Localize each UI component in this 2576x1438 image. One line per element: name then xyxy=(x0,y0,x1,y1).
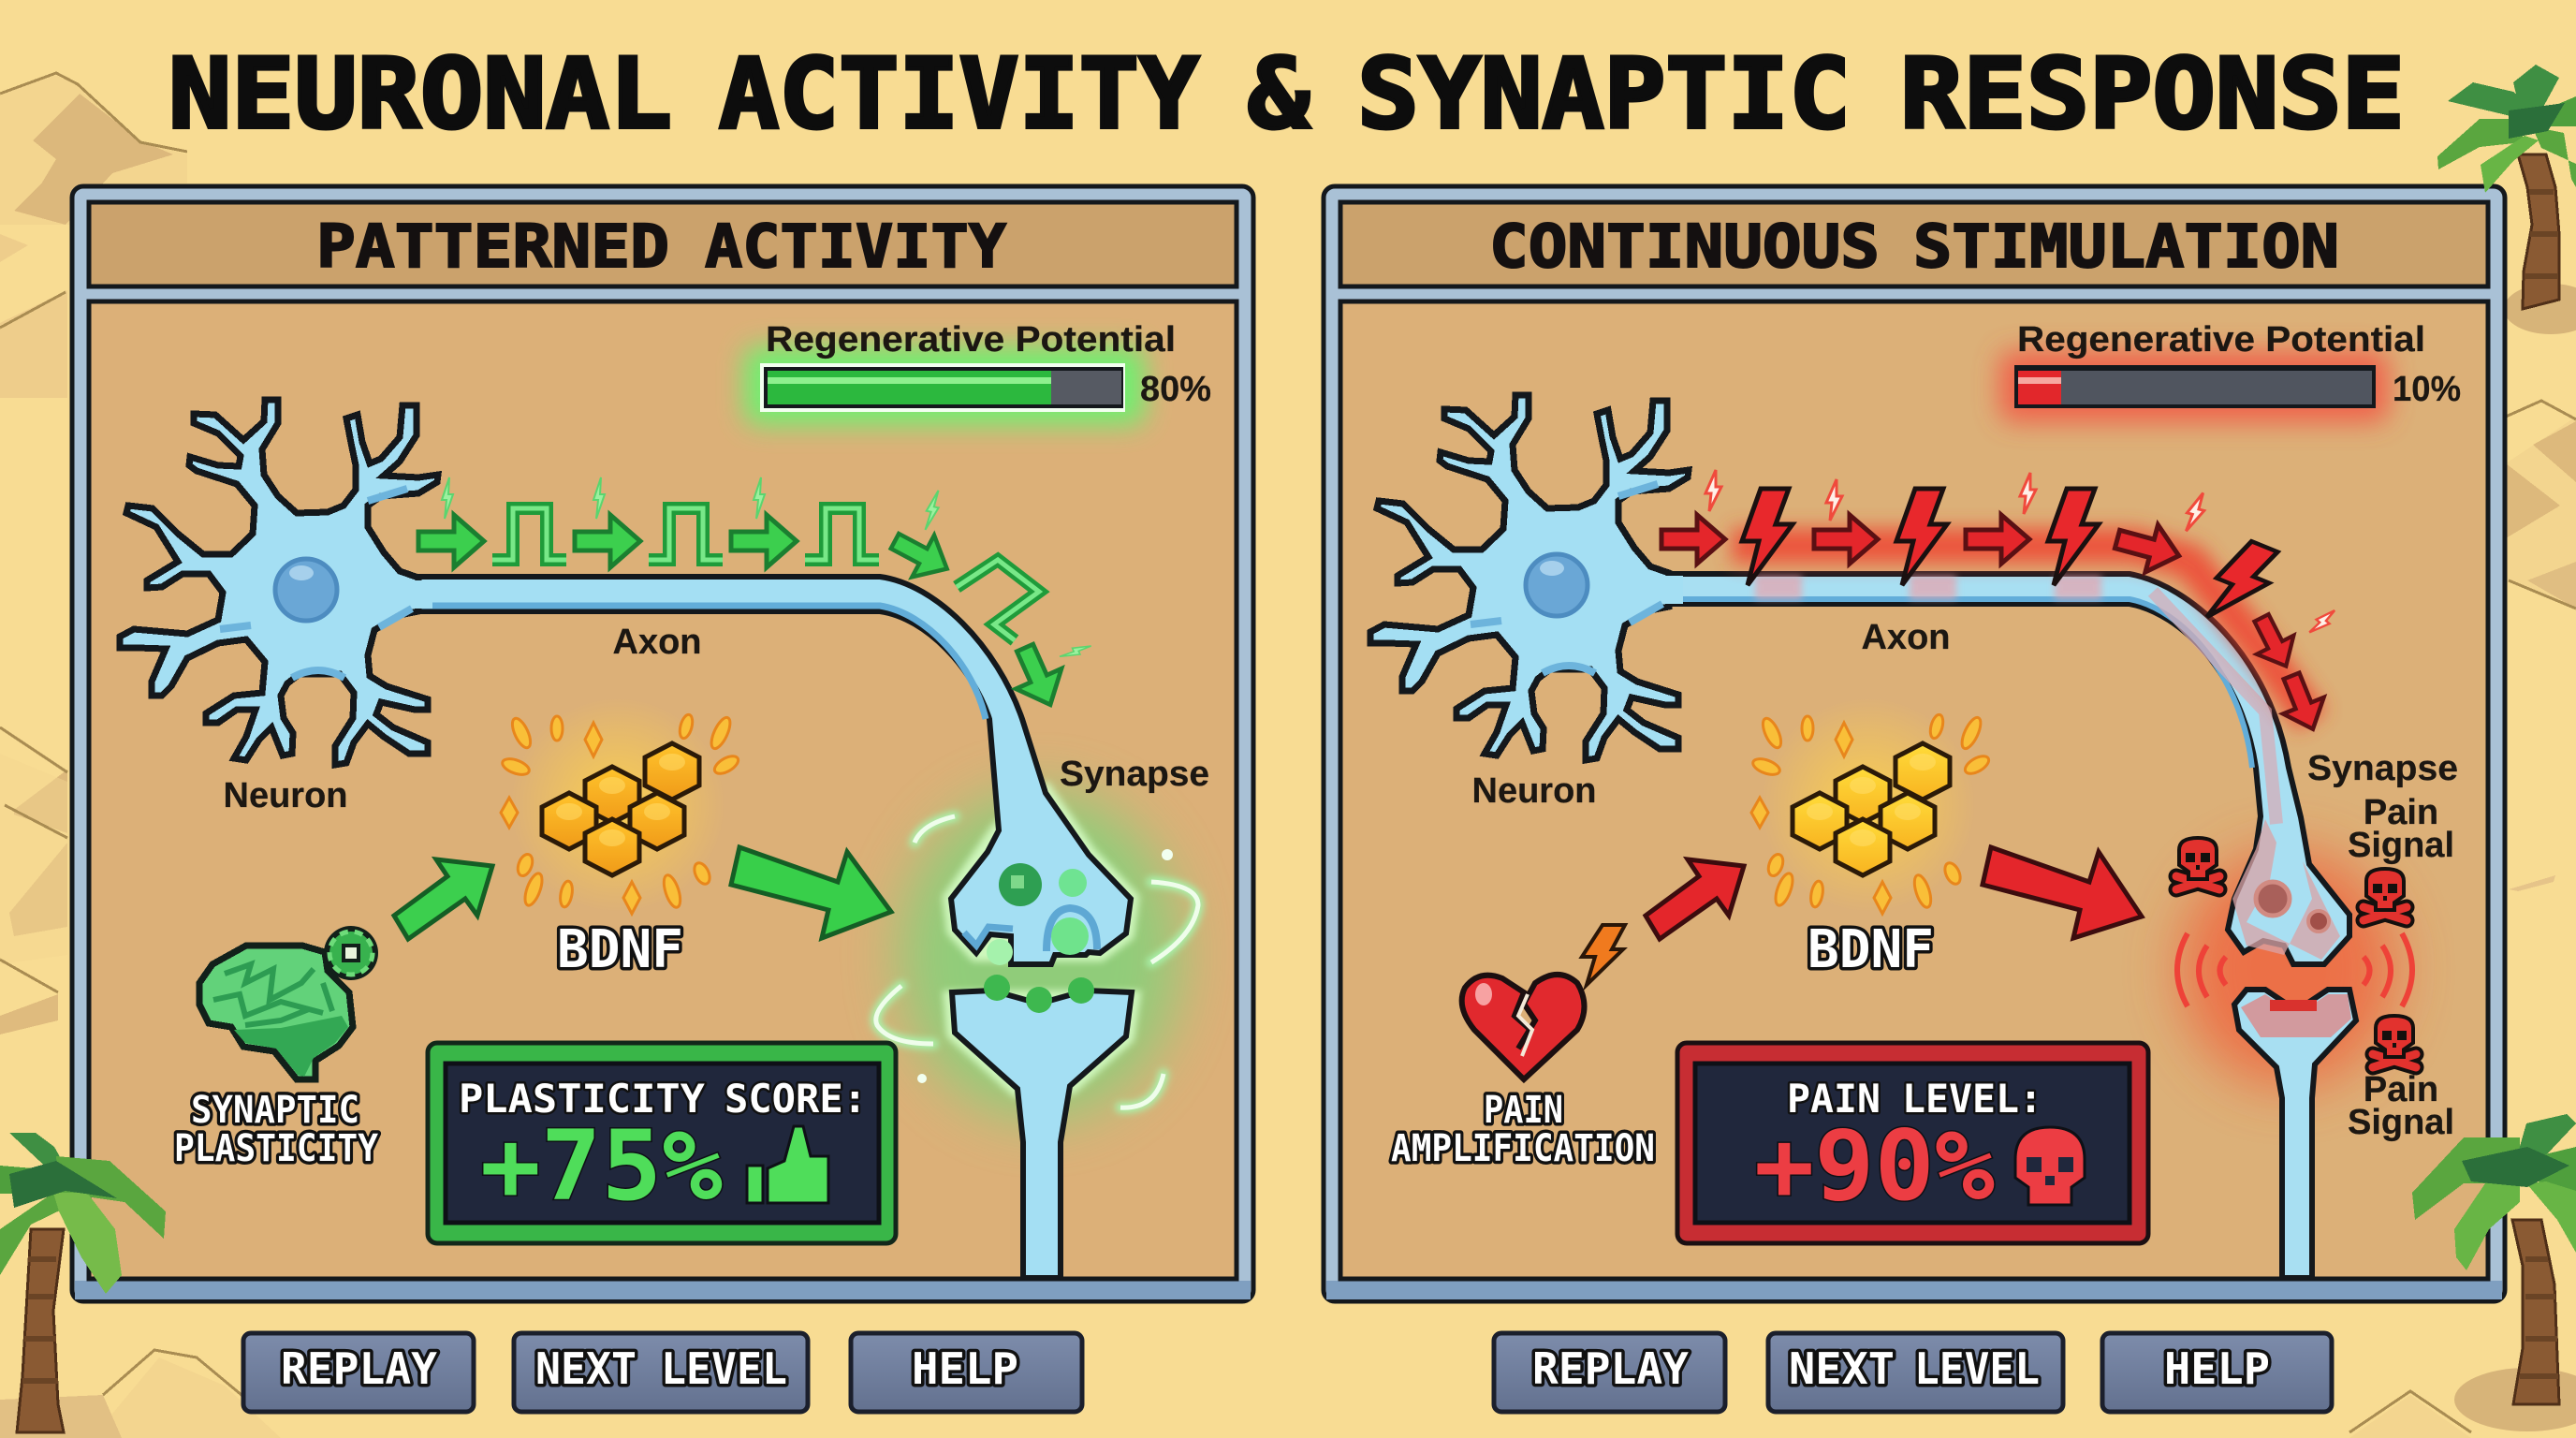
label: synapse: Synapse xyxy=(2307,749,2458,788)
panel heading: PATTERNED xyxy=(316,213,669,281)
regenerative potential meter: 80% xyxy=(1140,370,1211,409)
sand dunes, left margin xyxy=(0,73,281,1438)
plasticity score box: SCORE: xyxy=(724,1076,867,1122)
pain level box xyxy=(1677,1043,2148,1243)
buttons row, left xyxy=(243,1333,1082,1412)
post-synaptic terminal damaged xyxy=(2234,990,2356,1278)
label: pain signal lower: Pain xyxy=(2364,1070,2438,1109)
button: help: HELP xyxy=(2164,1343,2270,1394)
regenerative potential meter: 10% xyxy=(2393,370,2461,409)
button: replay: REPLAY xyxy=(1532,1343,1689,1394)
panel heading xyxy=(1489,213,2339,281)
label: axon: Axon xyxy=(612,623,702,662)
panel heading: STIMULATION xyxy=(1913,213,2339,281)
icon: thumbs up xyxy=(747,1126,828,1203)
label: neuron: Neuron xyxy=(1471,771,1597,811)
neuron xyxy=(120,400,1131,965)
label: pain signal upper: Pain xyxy=(2364,793,2438,832)
button: help xyxy=(851,1333,1082,1412)
main title: NEURONAL xyxy=(168,38,672,151)
main title xyxy=(168,38,2405,151)
button: next level: LEVEL xyxy=(1914,1343,2040,1394)
arrow: BDNF to synapse xyxy=(731,847,891,938)
button: next level xyxy=(1768,1333,2063,1412)
palm tree: top right xyxy=(2437,65,2576,309)
neuron xyxy=(1370,395,2349,964)
panel frame xyxy=(1324,186,2505,1301)
label: pain signal lower: Signal xyxy=(2348,1103,2454,1142)
label: axon: Axon xyxy=(1861,618,1951,657)
icon: skull and crossbones xyxy=(2176,838,2219,889)
icon: skull and crossbones xyxy=(2373,1016,2416,1067)
axon and presynaptic terminal xyxy=(402,577,1131,965)
label: synaptic plasticity xyxy=(174,1089,378,1170)
button: replay xyxy=(243,1333,474,1412)
buttons row, right xyxy=(1494,1333,2332,1412)
synapse red glow xyxy=(2181,852,2396,1086)
label: synaptic plasticity: PLASTICITY xyxy=(174,1127,378,1170)
button: next level: NEXT xyxy=(535,1343,637,1394)
button: next level: NEXT xyxy=(1789,1343,1895,1394)
BDNF cluster xyxy=(1751,697,1992,980)
button: replay xyxy=(1494,1333,1725,1412)
button: help xyxy=(2102,1333,2332,1412)
main title: ACTIVITY xyxy=(719,38,1199,151)
panel frame xyxy=(72,186,1253,1301)
plasticity score box: +75% xyxy=(480,1110,723,1223)
pain level box: +90% xyxy=(1754,1110,1995,1223)
main title: SYNAPTIC xyxy=(1357,38,1851,151)
BDNF cluster xyxy=(501,697,741,980)
label: pain amplification xyxy=(1391,1089,1655,1170)
icon: skull and crossbones xyxy=(2364,869,2407,920)
icon: brain with gear xyxy=(199,926,378,1079)
axon and damaged terminal xyxy=(1657,574,2349,964)
pain level box: LEVEL: xyxy=(1902,1076,2042,1122)
BDNF label: BDNF xyxy=(1808,919,1934,980)
panel: patterned activity xyxy=(72,186,1253,1412)
label: synaptic plasticity: SYNAPTIC xyxy=(191,1089,359,1132)
label: synapse: Synapse xyxy=(1060,755,1209,794)
label: pain amplification: AMPLIFICATION xyxy=(1391,1127,1655,1170)
synapse glow xyxy=(876,791,1198,1119)
post-synaptic terminal xyxy=(952,975,1132,1278)
icon: broken heart with bolt xyxy=(1462,925,1625,1079)
regenerative potential meter: Regenerative Potential xyxy=(766,320,1176,360)
main title: & xyxy=(1248,38,1310,151)
main title: RESPONSE xyxy=(1900,38,2405,151)
palm tree: bottom left xyxy=(0,1133,166,1432)
palm tree: bottom right xyxy=(2412,1114,2576,1404)
arrow: plasticity to BDNF xyxy=(394,859,492,939)
button: next level: LEVEL xyxy=(661,1343,787,1394)
pain signal waves xyxy=(2177,933,2412,1006)
panel: continuous stimulation xyxy=(1324,186,2505,1412)
regenerative potential meter xyxy=(744,320,1211,425)
pain level box: PAIN xyxy=(1787,1076,1881,1122)
panel heading: CONTINUOUS xyxy=(1489,213,1880,281)
BDNF label: BDNF xyxy=(557,919,683,980)
regenerative potential meter xyxy=(1999,320,2461,422)
sand dunes, right margin xyxy=(2349,401,2576,1438)
palm shadows xyxy=(2454,284,2576,1431)
signal train: green pulses and arrows xyxy=(418,477,1092,715)
arrow: pain to BDNF xyxy=(1646,859,1744,939)
regenerative potential meter: Regenerative Potential xyxy=(2017,320,2425,360)
plasticity score box xyxy=(428,1043,896,1243)
arrow: BDNF to synapse xyxy=(1983,847,2142,938)
panel heading xyxy=(316,213,1006,281)
button: replay: REPLAY xyxy=(281,1343,437,1394)
signal train: red bolts and arrows xyxy=(1661,470,2338,738)
label: neuron: Neuron xyxy=(223,776,348,815)
label: pain amplification: PAIN xyxy=(1484,1089,1563,1132)
label: pain signal upper: Signal xyxy=(2348,826,2454,865)
button: help: HELP xyxy=(912,1343,1018,1394)
button: next level xyxy=(514,1333,808,1412)
icon: skull xyxy=(2015,1127,2085,1205)
panel heading: ACTIVITY xyxy=(705,213,1006,281)
plasticity score box: PLASTICITY xyxy=(459,1076,706,1122)
